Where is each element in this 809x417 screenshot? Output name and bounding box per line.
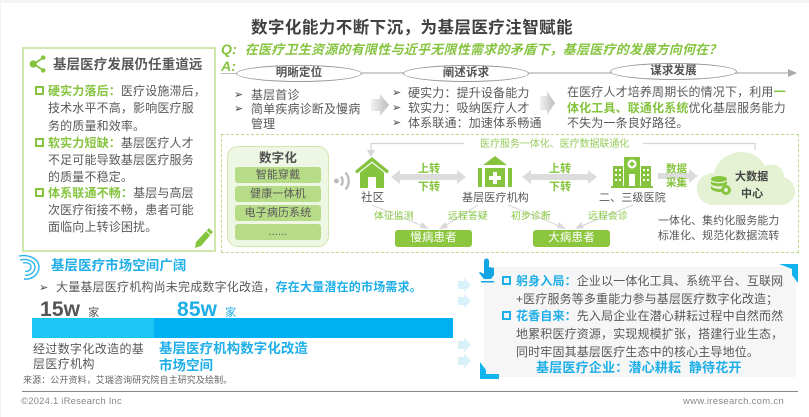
label: down referral left: 下转 bbox=[418, 181, 440, 193]
panel: digital care model bbox=[221, 134, 799, 253]
demands list: ➢ bbox=[392, 117, 401, 129]
market summary: ➢ bbox=[39, 282, 48, 294]
serious patients box bbox=[533, 230, 610, 247]
answer label: A: bbox=[221, 58, 236, 74]
stage: clear positioning bbox=[236, 65, 362, 82]
label: tertiary hospitals: 二、三级医院 bbox=[599, 192, 666, 204]
arrow: demands to development bbox=[540, 91, 555, 115]
label: service integration: 医疗服务一体化、医疗数据联通化 bbox=[480, 139, 629, 150]
arrows: bar to panel bbox=[458, 278, 471, 368]
label: up referral right: 上转 bbox=[549, 163, 571, 175]
icon: blue spiral bbox=[18, 254, 40, 280]
strategy conclusion: 基层医疗企业：潜心耕耘 静待花开 bbox=[536, 360, 742, 375]
label: down referral right: 下转 bbox=[549, 181, 571, 193]
corner: bottom left bbox=[480, 362, 499, 379]
positioning list: 管理 bbox=[251, 117, 275, 131]
data center cloud bbox=[697, 152, 795, 205]
icon: pencil bbox=[195, 228, 213, 248]
positioning list: ➢ bbox=[234, 103, 243, 115]
challenge: system connection: 次医疗衔接不畅，患者可能 bbox=[48, 203, 194, 217]
stage: seek development: 谋求发展 bbox=[650, 65, 697, 77]
item: wearables bbox=[235, 167, 321, 183]
demands list: ➢ bbox=[392, 87, 401, 99]
challenge: system connection bbox=[35, 186, 194, 234]
label: initial diagnosis: 初步诊断 bbox=[511, 211, 551, 222]
challenge: hard power bbox=[35, 84, 206, 133]
strategy: patient growth: 地累积医疗资源，实现规模扩张，搭建行业生态， bbox=[516, 327, 783, 341]
label: remote consultation: 远程会诊 bbox=[588, 211, 628, 222]
label: market space bbox=[159, 341, 308, 373]
item: electronic records: 电子病历系统 bbox=[245, 207, 311, 219]
cloud shape bbox=[697, 152, 795, 205]
challenge: soft power: 的质量不稳定。 bbox=[48, 170, 133, 184]
development text bbox=[567, 85, 786, 130]
label: primary institution: 基层医疗机构 bbox=[462, 192, 529, 204]
icon: database bbox=[711, 176, 731, 195]
label: center: 中心 bbox=[741, 188, 763, 200]
panel heading: 基层医疗发展仍任重道远 bbox=[53, 57, 202, 72]
stage: state demands: 阐述诉求 bbox=[443, 67, 489, 79]
panel: enterprise strategy bbox=[484, 267, 796, 377]
label: remote questions: 远程答疑 bbox=[448, 211, 488, 222]
title: 数字化能力不断下沉，为基层医疗注智赋能 bbox=[251, 19, 573, 37]
strategy: enter early bbox=[502, 274, 783, 306]
label: community: 社区 bbox=[361, 192, 384, 204]
feedback loop lines bbox=[367, 142, 756, 157]
label: up referral left: 上转 bbox=[418, 163, 440, 175]
panel: left challenges bbox=[22, 47, 216, 252]
demands list: 体系联通：加速体系畅通 bbox=[408, 116, 542, 130]
positioning list: 基层首诊 bbox=[251, 88, 300, 102]
positioning list bbox=[234, 88, 360, 131]
positioning list: ➢ bbox=[234, 89, 243, 101]
label: data collection: 数据 bbox=[666, 163, 687, 175]
footer copyright: ©2024.1 iResearch Inc bbox=[21, 396, 122, 407]
market heading: 基层医疗市场空间广阔 bbox=[51, 258, 186, 273]
icon: wireless signal bbox=[334, 172, 350, 190]
market summary: 大量基层医疗机构尚未完成数字化改造，存在大量潜在的市场需求。 bbox=[56, 280, 422, 294]
value: 85w: 85w 家 bbox=[177, 298, 236, 321]
arrow: positioning to demands bbox=[371, 94, 389, 116]
strategy: patient growth: 花香自来：先入局企业在潜心耕耘过程中自然而然 bbox=[516, 309, 783, 323]
stage: seek development bbox=[610, 63, 737, 80]
demands list bbox=[392, 86, 542, 130]
development text: 体化工具、联通化系统优化基层服务能力 bbox=[567, 101, 786, 115]
label: big data center: 大数据 bbox=[735, 171, 768, 183]
strategy: enter early: +医疗服务等多重能力参与基层医疗数字化改造； bbox=[516, 292, 778, 306]
item: health kiosk: 健康一体机 bbox=[250, 188, 306, 200]
item: wearables: 智能穿戴 bbox=[256, 169, 300, 181]
label: data collection: 采集 bbox=[666, 177, 687, 189]
data center description: 一体化、集约化服务能力 bbox=[658, 215, 779, 227]
challenge: soft power: 软实力短缺：基层医疗人才 bbox=[48, 136, 194, 150]
positioning list: 简单疾病诊断及慢病 bbox=[251, 102, 360, 116]
icon: network node bbox=[30, 55, 46, 73]
digitalization heading: 数字化 bbox=[259, 151, 297, 165]
icon: primary institution bbox=[478, 156, 512, 187]
challenge: system connection: 体系联通不畅：基层与高层 bbox=[48, 186, 194, 200]
patient connector arrows bbox=[372, 204, 633, 229]
arrow: hospital to data center bbox=[658, 169, 698, 183]
demands list: ➢ bbox=[392, 102, 401, 114]
label: digitalized institutions: 层医疗机构 bbox=[33, 357, 95, 371]
demands list: 软实力：吸纳医疗人才 bbox=[408, 101, 530, 115]
footer website: www.iresearch.com.cn bbox=[683, 396, 784, 407]
label: digitalized institutions bbox=[33, 342, 144, 371]
strategy: patient growth bbox=[502, 309, 783, 359]
chronic patients box bbox=[395, 230, 472, 247]
chronic patients box: 慢病患者 bbox=[410, 232, 457, 244]
item: more: ...... bbox=[268, 226, 288, 238]
challenge: hard power: 技术水平不高，影响医疗服 bbox=[48, 101, 194, 115]
arrow: community to institution bbox=[391, 170, 466, 184]
label: market space: 市场空间 bbox=[159, 358, 213, 373]
icon: tapping hand bbox=[479, 258, 494, 282]
question line: Q: 在医疗卫生资源的有限性与近乎无限性需求的矛盾下，基层医疗的发展方向何在？ bbox=[221, 41, 722, 57]
demands list: 硬实力：提升设备能力 bbox=[408, 86, 530, 100]
strategy: enter early: 躬身入局：企业以一体化工具、系统平台、互联网 bbox=[516, 274, 783, 288]
item: electronic records bbox=[235, 205, 321, 221]
data center description bbox=[658, 214, 779, 242]
stage: clear positioning: 明晰定位 bbox=[276, 67, 322, 79]
bar segment: digitalized bbox=[32, 318, 154, 338]
challenge: hard power: 硬实力落后：医疗设施滞后， bbox=[48, 84, 206, 98]
value: 15w: 15w 家 bbox=[40, 298, 99, 321]
item: more bbox=[235, 224, 321, 240]
label: vitals monitoring: 体征监测 bbox=[374, 211, 414, 222]
corner: top right bbox=[779, 264, 798, 283]
footer rule bbox=[22, 391, 798, 392]
serious patients box: 大病患者 bbox=[548, 232, 595, 244]
challenge: hard power: 务的质量和效率。 bbox=[48, 119, 145, 133]
bar chart: market share bbox=[32, 318, 453, 338]
source note: 来源：公开资料，艾瑞咨询研究院自主研究及绘制。 bbox=[23, 375, 232, 385]
timeline line with arrow bbox=[362, 69, 797, 77]
arrow: institution to hospital bbox=[522, 170, 597, 184]
label: data collection bbox=[666, 163, 687, 189]
icon: community house bbox=[355, 157, 389, 188]
challenge: soft power bbox=[35, 136, 194, 184]
panel: digitalization bbox=[227, 146, 329, 247]
development text: 不失为一条良好路径。 bbox=[567, 116, 689, 130]
label: market space: 基层医疗机构数字化改造 bbox=[159, 341, 308, 356]
label: digitalized institutions: 经过数字化改造的基 bbox=[33, 342, 144, 356]
data center description: 标准化、规范化数据流转 bbox=[658, 230, 779, 242]
challenge: system connection: 面临向上转诊困扰。 bbox=[48, 220, 157, 234]
icon: hospital bbox=[611, 157, 653, 188]
item: health kiosk bbox=[235, 186, 321, 202]
stage: state demands bbox=[403, 65, 529, 82]
challenge: soft power: 不足可能导致基层医疗服务 bbox=[48, 153, 194, 167]
strategy: patient growth: 同时牢固其基层医疗生态中的核心主导地位。 bbox=[516, 345, 759, 359]
development text: 在医疗人才培养周期长的情况下，利用一 bbox=[567, 85, 786, 99]
